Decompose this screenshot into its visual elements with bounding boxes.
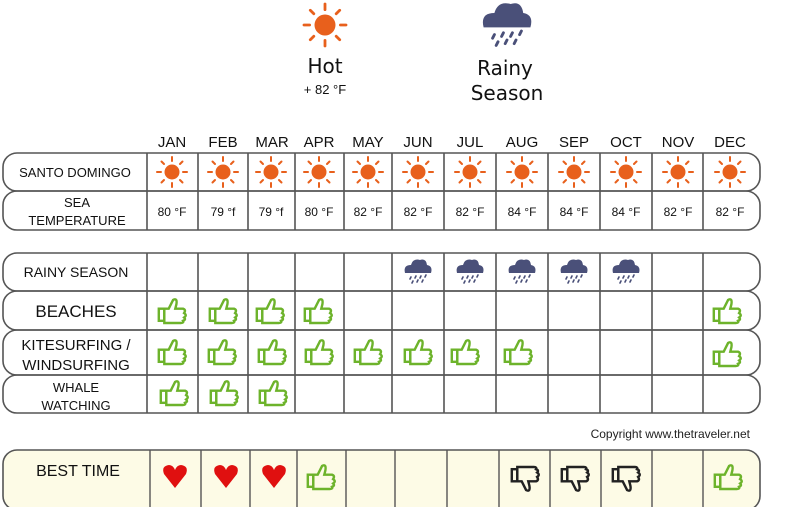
row: sea temperature: 82 °F <box>716 205 744 219</box>
legend: hot: + 82 °F <box>304 82 346 97</box>
row: best time: BEST TIME <box>36 463 120 480</box>
copyright: Copyright www.thetraveler.net <box>591 427 751 441</box>
month headers: NOV <box>662 134 694 151</box>
row: whale watching: WHALE <box>53 380 99 395</box>
row: sea temperature: 80 °F <box>305 205 333 219</box>
legend: hot: Hot <box>307 54 343 78</box>
row: sea temperature: 80 °F <box>158 205 186 219</box>
row: kitesurfing: WINDSURFING <box>22 357 130 374</box>
row: sea temperature: 79 °f <box>211 205 236 219</box>
table: climate <box>3 153 760 230</box>
row: santo domingo <box>19 157 745 187</box>
month headers: OCT <box>610 134 642 151</box>
row: sea temperature <box>28 195 744 228</box>
row: beaches: BEACHES <box>35 302 117 321</box>
month headers: JAN <box>158 134 186 151</box>
row: beaches <box>35 299 741 323</box>
row: whale watching: WATCHING <box>41 398 111 413</box>
row: sea temperature: 82 °F <box>354 205 382 219</box>
month headers: AUG <box>506 134 538 151</box>
month headers: APR <box>304 134 335 151</box>
row: rainy season <box>24 260 640 283</box>
row: sea temperature: 82 °F <box>404 205 432 219</box>
row: sea temperature: 84 °F <box>560 205 588 219</box>
month headers: JUN <box>403 134 433 151</box>
month headers: FEB <box>208 134 238 151</box>
row: kitesurfing <box>21 337 741 374</box>
month headers: MAY <box>352 134 384 151</box>
row: sea temperature: 84 °F <box>612 205 640 219</box>
row: sea temperature: 82 °F <box>664 205 692 219</box>
legend: hot <box>304 4 346 97</box>
row: sea temperature: 82 °F <box>456 205 484 219</box>
row: sea temperature: 79 °f <box>259 205 284 219</box>
row: kitesurfing: KITESURFING / <box>21 337 131 354</box>
row: best time <box>3 450 760 507</box>
row: rainy season: RAINY SEASON <box>24 264 128 280</box>
legend: rainy season <box>471 3 543 105</box>
table: activities <box>3 253 760 413</box>
row: sea temperature: TEMPERATURE <box>28 213 126 228</box>
month headers: JUL <box>457 134 483 151</box>
month headers: MAR <box>255 134 289 151</box>
row: whale watching <box>41 380 287 413</box>
month headers <box>158 134 746 151</box>
legend: rainy season: Season <box>471 81 543 105</box>
row: sea temperature: 84 °F <box>508 205 536 219</box>
month headers: DEC <box>714 134 746 151</box>
legend: rainy season: Rainy <box>477 56 533 80</box>
row: santo domingo: SANTO DOMINGO <box>19 165 131 180</box>
row: sea temperature: SEA <box>64 195 90 210</box>
month headers: SEP <box>559 134 589 151</box>
